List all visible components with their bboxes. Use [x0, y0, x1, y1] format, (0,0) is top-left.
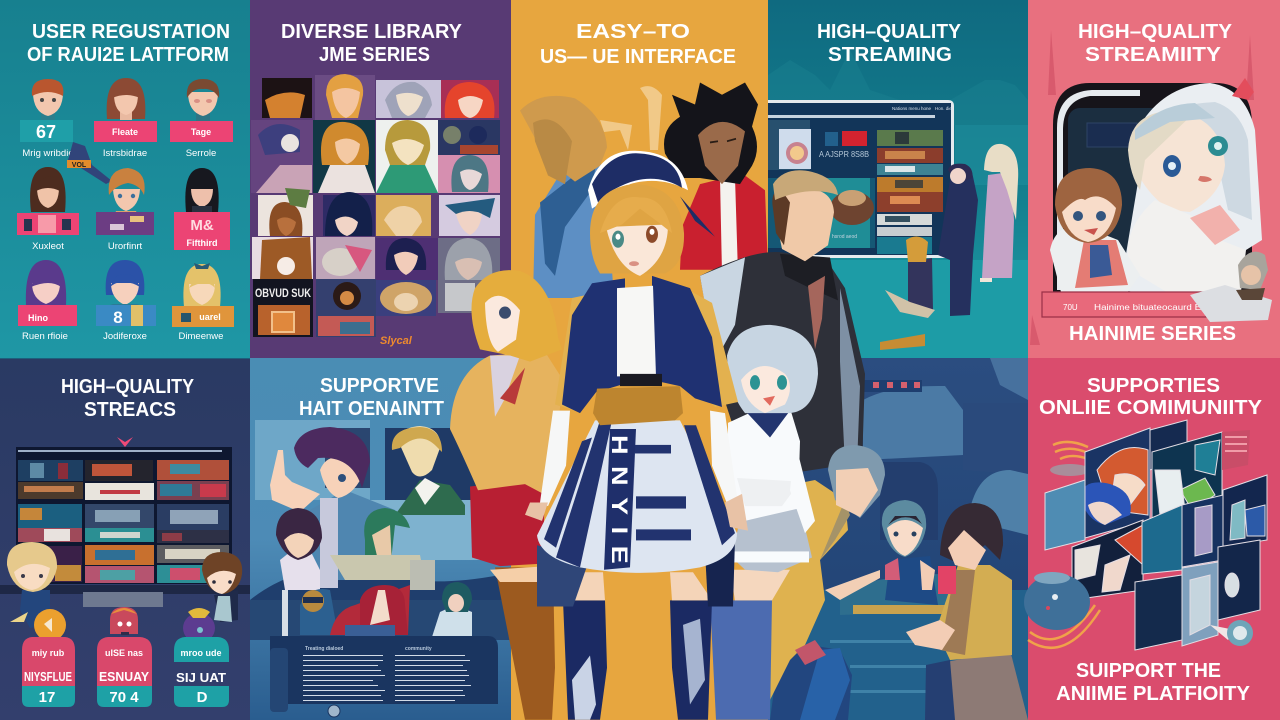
- phone: [1053, 83, 1252, 293]
- label: urorfinrt: Urorfinrt: [108, 241, 143, 252]
- character: dark hair girl: [906, 503, 1028, 720]
- label: fifthird: M&: [190, 217, 214, 234]
- face: [606, 224, 668, 276]
- character: purple hair boy pointing: [270, 427, 395, 588]
- label: fifthird: Fifthird: [186, 238, 218, 248]
- label: istrsbidrae: Fleate: [112, 127, 138, 137]
- skirt with text: [537, 420, 737, 573]
- card: nivsflue 17: [22, 637, 75, 707]
- tile: group characters: [438, 120, 500, 155]
- tile: black red: [1072, 520, 1143, 600]
- character: small kid: [882, 500, 938, 605]
- tile: gold hair face: [376, 195, 431, 236]
- label: xuxleot: Xuxleot: [32, 241, 64, 252]
- skirt with text: HNYIE: [607, 435, 631, 564]
- eyes: [612, 226, 658, 248]
- label: 67: [20, 120, 74, 159]
- character: main girl with beret: [525, 151, 748, 720]
- heading: high-quality streaming: [817, 21, 962, 66]
- card: sijuat 7: D: [197, 689, 208, 706]
- caption bar: 70U: [1063, 303, 1078, 312]
- heading: supporties online community: SUPPORTIES: [1087, 375, 1220, 397]
- label: istrsbidrae: Istrsbidrae: [103, 148, 147, 159]
- planet sphere: [1024, 572, 1090, 630]
- card: esnuay 70: ESNUAY: [99, 669, 149, 684]
- tile: teal sea: [1142, 505, 1182, 574]
- avatar: blue hair boy: [105, 260, 145, 307]
- footer: support the anime platfioity: [1056, 660, 1251, 705]
- speech badge: [1210, 620, 1253, 646]
- footer: support the anime platfioity: SUIPPORT THE: [1076, 660, 1221, 682]
- table lines: [303, 655, 471, 701]
- character: silver haired girl: [1120, 78, 1262, 300]
- monitor: [768, 100, 954, 258]
- character: red hair embracing pair: [330, 585, 410, 637]
- pale microphone motif: [600, 86, 662, 150]
- tile: navy lower right: [1218, 540, 1260, 620]
- chibi: blonde boy: [7, 542, 57, 628]
- heading: high-quality streamiity: STREAMIITY: [1085, 44, 1222, 66]
- heading: diverse library: JME SERIES: [319, 44, 430, 66]
- small orange scribble: Slycal: [380, 335, 413, 347]
- heading: high-quality streamiity: [1078, 21, 1233, 66]
- chibi: brown hair kid: [202, 552, 242, 622]
- streaming tv screen: [16, 447, 232, 584]
- tile: golden curls: [313, 120, 375, 193]
- tile: red hair: [1085, 428, 1150, 538]
- white gloves: [525, 411, 748, 531]
- character: green hair figure: [330, 508, 435, 590]
- label: dimeenwe: uarel: [199, 312, 221, 322]
- icon: round badge: [328, 705, 340, 717]
- character: woman in lilac dress: [980, 144, 1018, 282]
- decorative drips: [1030, 30, 1254, 345]
- heading: supportve: [299, 375, 444, 420]
- label: serrole: Tage: [191, 127, 211, 137]
- screen tiles: A AJSPR 8S8B: [819, 150, 869, 159]
- avatar: ginger boy: [109, 168, 145, 220]
- avatar: brown hair boy: [187, 79, 219, 122]
- tile: dark with orange character: [262, 78, 312, 118]
- card: nivsflue 17: 17: [39, 689, 55, 706]
- tile: olive hair girl: [376, 120, 438, 193]
- label: 67: 67: [36, 122, 56, 142]
- character: grey hat dwarf: [1190, 252, 1272, 322]
- monitor: Nations menu hone: [892, 106, 932, 111]
- row two tiles: [18, 504, 229, 543]
- character: dark hair boy: [276, 508, 322, 590]
- heading: user registation: USER REGUSTATION: [32, 21, 230, 43]
- corset: [593, 386, 683, 425]
- machinery: [768, 358, 1029, 720]
- foreground cast: [450, 151, 818, 720]
- heading: high-quality streaming: HIGH–QUALITY: [817, 21, 962, 43]
- panel: diverse library: [250, 0, 512, 359]
- avatar: dark brown hair girl: [30, 167, 66, 212]
- tile: rose grey: [316, 237, 375, 279]
- heading: diverse library: [281, 21, 463, 66]
- heading: user registation: OF RAUI2E LATTFORM: [27, 44, 229, 66]
- community table: community: [405, 646, 432, 652]
- collage tiles: [1045, 420, 1267, 650]
- mouth: [629, 261, 639, 266]
- label: xuxleot: [17, 213, 79, 252]
- card: esnuay 70: [97, 637, 152, 707]
- navy jacket: [562, 276, 722, 413]
- tile: pale lower: [1182, 562, 1218, 646]
- label: ruen rfioie: Ruen rfioie: [22, 331, 68, 342]
- card: sijuat 7: mroo ude: [180, 648, 222, 658]
- screen tiles: [768, 120, 943, 254]
- heading: user registation: [27, 21, 230, 66]
- character: blonde boy in window: [392, 426, 465, 515]
- tile: blue spiky hair: [439, 195, 500, 236]
- community table: [270, 636, 498, 717]
- tile: navy hair girl: [323, 192, 375, 236]
- heading: high-quality streacs: HIGH–QUALITY: [61, 376, 195, 398]
- city skyline: [768, 50, 1028, 125]
- heading: supportve: SUPPORTVE: [320, 375, 439, 397]
- boots: [563, 572, 712, 720]
- cape tail left: [537, 545, 590, 607]
- label: istrsbidrae: [94, 121, 157, 159]
- tile: dark lower: [1135, 575, 1182, 650]
- tile: black poster obvud suk: [253, 279, 313, 337]
- tile: blonde bundle: [376, 280, 436, 316]
- caption bar: Hainime bituateocaurd Ex: [1094, 303, 1206, 312]
- fringe: [600, 197, 672, 233]
- avatar: purple hair girl: [26, 260, 66, 305]
- character: silver haired girl in white: [710, 325, 818, 720]
- caption bar: [1042, 292, 1206, 317]
- tile: brown hair face: [258, 188, 313, 236]
- orange arcs: [1028, 442, 1100, 648]
- label: urorfinrt: [96, 212, 154, 252]
- cape tail right: [705, 539, 735, 607]
- label: 85: [96, 305, 156, 342]
- avatar: black hair girl: [185, 168, 219, 213]
- tile: red hair face: [441, 80, 499, 118]
- pink stripes top right: [1222, 430, 1250, 470]
- footer: hainime series: HAINIME SERIES: [1069, 323, 1236, 345]
- grey blob: [1050, 464, 1090, 476]
- label: dimeenwe: Dimeenwe: [179, 331, 223, 342]
- tile: navy hair on purple: [376, 238, 438, 280]
- tile: brown coat: [252, 237, 313, 279]
- heading: supportve: HAIT OENAINTT: [299, 398, 444, 420]
- screen tiles: hsrod aeod: [832, 234, 857, 240]
- card: nivsflue 17: NIYSFLUE: [24, 669, 72, 684]
- footer: support the anime platfioity: ANIIME PLATFIOITY: [1056, 683, 1251, 705]
- panel: machinery scene: [768, 358, 1029, 720]
- mascot: orange: [34, 609, 66, 641]
- hair: [590, 184, 684, 273]
- tile: purple with flowers: [251, 120, 313, 193]
- label: 85: Jodiferoxe: [103, 331, 147, 342]
- label: ruen rfioie: Hino: [28, 313, 48, 323]
- label: fifthird: [174, 212, 230, 250]
- windows background: [250, 420, 512, 640]
- card: esnuay 70: 70 4: [109, 689, 139, 706]
- heading: high-quality streamiity: HIGH–QUALITY: [1078, 21, 1233, 43]
- poster grid: [251, 74, 500, 347]
- label: dimeenwe: [172, 306, 234, 342]
- heading: supporties online community: ONLIIE COMIMUNIITY: [1039, 397, 1263, 419]
- panel: user registation: [0, 0, 251, 360]
- character: goggles kid: [282, 589, 338, 636]
- tile: lavender: [1182, 495, 1223, 567]
- heading: easy-to-use interface: US— UE INTERFACE: [540, 46, 736, 68]
- label: ruen rfioie: [18, 305, 77, 342]
- character: man with cap in dark jacket: [700, 170, 865, 472]
- character: white shirt woman: [432, 582, 472, 637]
- avatar: blonde girl: [183, 263, 221, 307]
- tile: teal green: [1152, 432, 1222, 522]
- card: nivsflue 17: miy rub: [32, 648, 65, 658]
- panel: supportve: [250, 358, 512, 720]
- character: brown hair chibi: [1050, 168, 1140, 296]
- ribbon: connector: VOL: [72, 162, 87, 169]
- row three tiles: [18, 545, 229, 583]
- character: blonde girl in tan jacket: [450, 270, 563, 720]
- beret: [588, 151, 688, 209]
- tile: teal hair pink bg: [438, 155, 500, 193]
- tile: navy right: [1223, 475, 1267, 547]
- mascot: purple: [183, 608, 215, 643]
- panel: high-quality streaming: [768, 0, 1029, 359]
- ribbon: connector: [67, 142, 112, 184]
- heading: high-quality streaming: STREAMING: [828, 44, 952, 66]
- shelf and stand: [0, 585, 251, 607]
- mascot: red: [110, 607, 138, 635]
- panel: high-quality streacs: [0, 359, 251, 720]
- character: black haired man in red jacket: [664, 82, 768, 273]
- tile: top right: [1150, 420, 1187, 470]
- character: kneeling blonde: [880, 236, 935, 350]
- community table: Treating dialoed: [305, 646, 343, 652]
- avatar: long brown hair girl: [107, 78, 145, 120]
- heading: high-quality streacs: STREACS: [84, 399, 176, 421]
- label: serrole: [170, 121, 233, 159]
- monitor: Hon. diet: [935, 106, 954, 111]
- tile: colourful crowd: [316, 279, 376, 337]
- supporting cast behind main girl: [520, 82, 865, 472]
- heading: high-quality streacs: [61, 376, 195, 421]
- label: serrole: Serrole: [186, 148, 216, 159]
- tile: pale blue waves: [1045, 480, 1085, 550]
- heading: easy-to-use interface: EASY–TO: [576, 21, 690, 43]
- heading: supporties online community: [1039, 375, 1263, 419]
- label: 85: 8: [113, 308, 123, 327]
- character: long haired man in blue coat: [520, 96, 614, 298]
- heading: diverse library: DIVERSE LIBRARY: [281, 21, 463, 43]
- panel: supporties online community: [1024, 358, 1280, 720]
- row one tiles: [18, 460, 229, 500]
- icon: pink chevron: [117, 437, 133, 447]
- character: navy coat figure: [938, 164, 978, 316]
- card: esnuay 70: uISE nas: [105, 648, 143, 658]
- tile: blue hair boy: [1080, 482, 1131, 525]
- character: boy in yellow shirt: [755, 445, 885, 720]
- gold sleeves: [555, 292, 738, 411]
- tile: golden hair face: [315, 74, 375, 120]
- heading: easy-to-use interface: [540, 21, 736, 68]
- tile: grey helmet: [438, 238, 500, 313]
- card: sijuat 7: [174, 637, 229, 707]
- avatar: orange cap boy: [32, 79, 63, 122]
- tile: silver hair face: [376, 80, 441, 118]
- panel: easy-to-use interface: [511, 0, 768, 720]
- label: 67: Mrig wribdie: [22, 148, 74, 159]
- tile: black poster obvud suk: OBVUD SUK: [255, 286, 311, 300]
- panel: high-quality streamiity: [1028, 0, 1280, 359]
- card: sijuat 7: SIJ UAT: [176, 670, 226, 685]
